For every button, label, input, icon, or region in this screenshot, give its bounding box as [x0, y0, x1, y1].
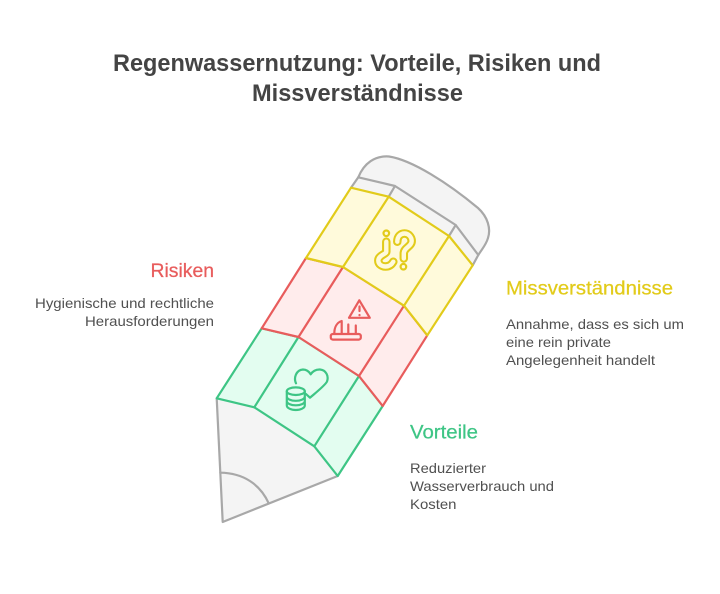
label: Vorteile: Kosten: [410, 496, 456, 512]
label: Risiken: [35, 261, 214, 329]
label: Missverständnisse: eine rein private: [506, 334, 611, 350]
label: Risiken: Risiken: [150, 261, 214, 282]
label: Vorteile: Vorteile: [410, 422, 478, 444]
title: Missverständnisse: [252, 80, 463, 107]
label: Risiken: Herausforderungen: [85, 313, 214, 329]
segment: Vorteile: [217, 328, 383, 476]
icon: coins and heart: [287, 369, 328, 410]
segment: Missverständnisse: [306, 188, 473, 335]
label: Risiken: Hygienische und rechtliche: [35, 295, 214, 311]
label: Vorteile: Reduzierter: [410, 460, 486, 476]
label: Missverständnisse: Angelegenheit handelt: [506, 352, 655, 368]
icon: question marks: [378, 230, 412, 270]
segment: Risiken: [262, 258, 427, 406]
title: [113, 50, 601, 107]
title: Regenwassernutzung: Vorteile, Risiken und: [113, 50, 601, 77]
label: Missverständnisse: Annahme, dass es sich um: [506, 316, 684, 332]
label: Vorteile: [410, 422, 554, 512]
label: Vorteile: Wasserverbrauch und: [410, 478, 554, 494]
label: Missverständnisse: [506, 278, 684, 368]
pencil diagram: [217, 156, 489, 522]
pencil tip: [217, 398, 338, 522]
icon: warning triangle and hard hat: [331, 300, 370, 340]
eraser: [351, 156, 489, 265]
label: Missverständnisse: Missverständnisse: [506, 278, 673, 300]
